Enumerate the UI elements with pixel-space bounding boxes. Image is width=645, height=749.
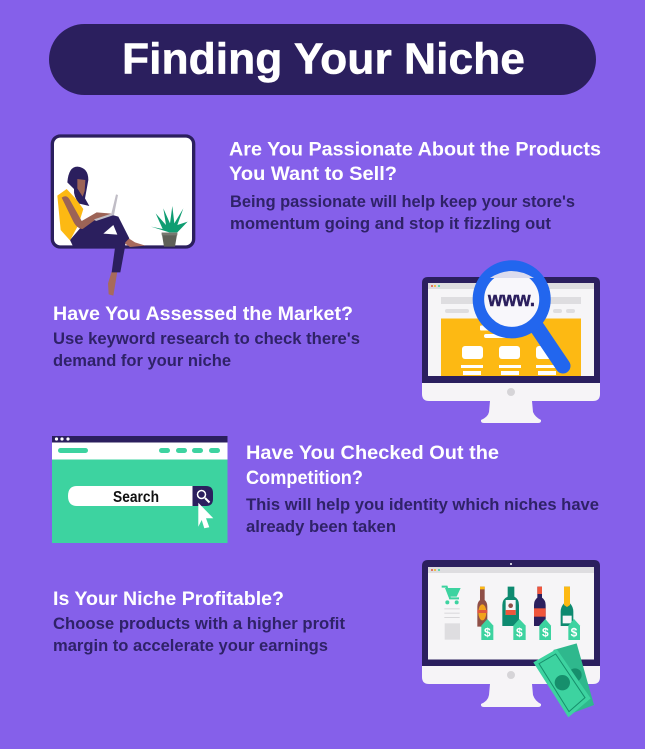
legs bbox=[70, 213, 129, 272]
illustration: browser search window: Search bbox=[113, 489, 159, 506]
illustration: browser search window bbox=[52, 436, 228, 543]
illustration: monitor with bottles and cash: $ bbox=[571, 626, 578, 640]
illustration: monitor with magnifier bbox=[422, 266, 600, 423]
heading: market: Have You Assessed the Market? bbox=[53, 303, 353, 325]
heading: passion: Are You Passionate About the Products bbox=[229, 138, 601, 160]
text: market description: Use keyword research to check there's bbox=[53, 330, 360, 348]
laptop bbox=[94, 194, 118, 221]
text: market description: demand for your niche bbox=[53, 352, 231, 370]
illustration: woman with laptop in window bbox=[52, 136, 194, 296]
text: profitable description bbox=[53, 615, 346, 655]
icon: cart bbox=[442, 587, 459, 598]
price tags bbox=[481, 619, 580, 640]
illustration: monitor with bottles and cash bbox=[422, 560, 600, 717]
heading: profitable: Is Your Niche Profitable? bbox=[53, 588, 284, 610]
illustration: monitor with bottles and cash: $ bbox=[484, 626, 491, 640]
text: passion description: Being passionate will help keep your store's bbox=[230, 193, 575, 211]
text: competition description: This will help you identity which niches have bbox=[246, 496, 599, 514]
heading: competition line 2: Competition? bbox=[246, 467, 363, 489]
text: profitable description: Choose products with a higher profit bbox=[53, 615, 346, 633]
text: passion description bbox=[230, 193, 575, 233]
heading: competition: Have You Checked Out the bbox=[246, 442, 499, 464]
text: market description bbox=[53, 330, 360, 370]
illustration: monitor with magnifier: www. bbox=[487, 289, 535, 311]
text: competition description: already been taken bbox=[246, 518, 396, 536]
title banner: Finding Your Niche bbox=[122, 34, 525, 84]
hair and face bbox=[67, 167, 89, 206]
foot on sill bbox=[123, 237, 145, 247]
hanging foot bbox=[108, 272, 117, 296]
text: passion description: momentum going and stop it fizzling out bbox=[230, 215, 551, 233]
illustration: monitor with bottles and cash: $ bbox=[516, 626, 523, 640]
arm bbox=[62, 196, 112, 229]
bottles bbox=[477, 587, 487, 627]
text: profitable description: margin to accelerate your earnings bbox=[53, 637, 328, 655]
text: competition description bbox=[246, 496, 599, 536]
illustration: monitor with bottles and cash: $ bbox=[542, 626, 549, 640]
plant bbox=[151, 206, 188, 232]
heading: passion line 2: You Want to Sell? bbox=[229, 163, 397, 185]
cash bbox=[553, 643, 594, 713]
title banner bbox=[49, 24, 596, 95]
shirt bbox=[57, 189, 83, 240]
